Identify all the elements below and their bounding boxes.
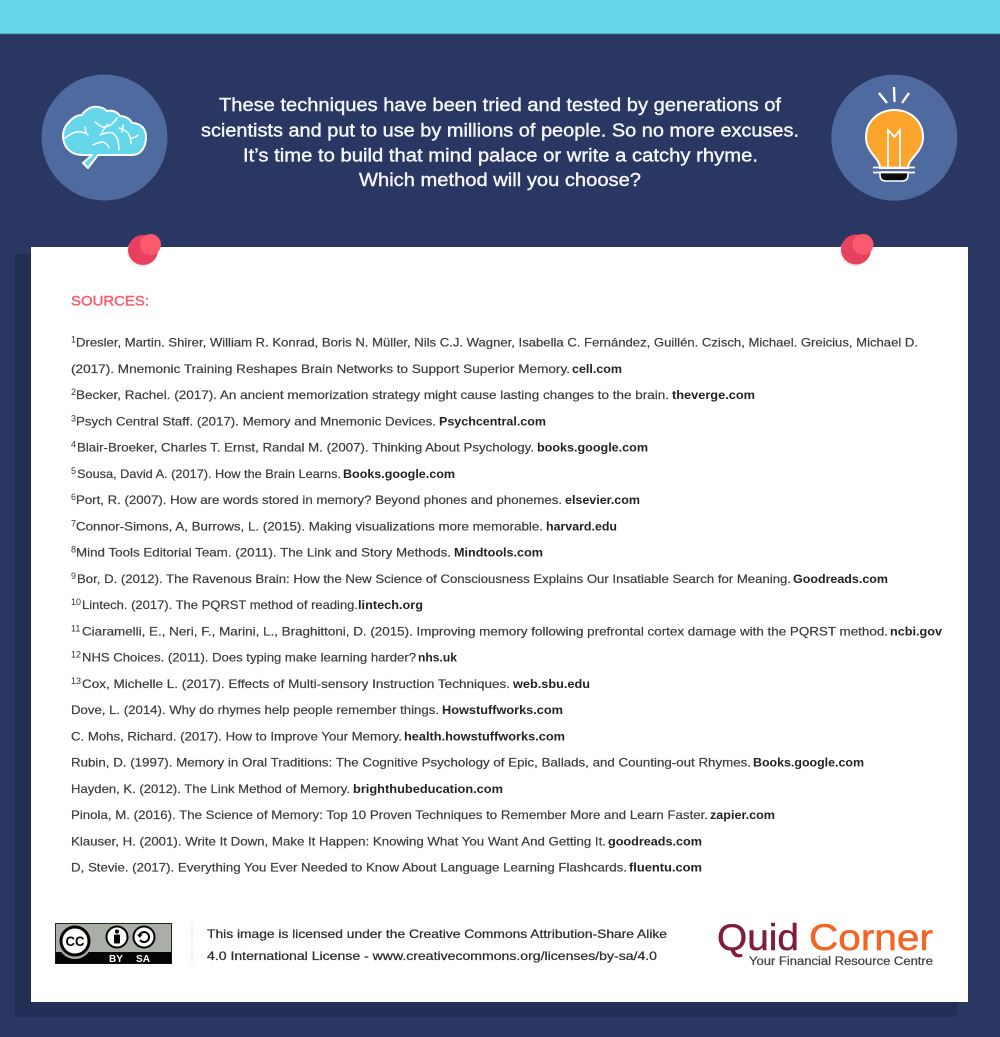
license text	[207, 927, 668, 963]
source 8: Mindtools.com	[454, 546, 543, 560]
license text: This image is licensed under the Creative Commons Attribution-Share Alike	[207, 927, 668, 941]
source 12: nhs.uk	[418, 650, 457, 664]
source: Dove: Dove, L. (2014). Why do rhymes help people remember things.	[71, 703, 439, 717]
source: Pinola: Pinola, M. (2016). The Science of Memory: Top 10 Proven Techniques to Remember More and Learn Faster.	[71, 808, 708, 822]
source 5: Books.google.com	[343, 467, 455, 481]
source 5	[71, 466, 455, 481]
source 7: 7	[71, 518, 76, 528]
icon: brain	[42, 74, 168, 200]
source 3	[71, 413, 546, 428]
source 3: 3	[71, 413, 76, 423]
sources heading: SOURCES:	[71, 292, 149, 308]
source 6: 6	[71, 492, 76, 502]
source 3: Psychcentral.com	[439, 414, 546, 428]
source 12: 12	[71, 650, 81, 660]
pin: left	[127, 234, 161, 267]
intro text: It’s time to build that mind palace or write a catchy rhyme.	[243, 144, 758, 166]
source: D, Stevie: D, Stevie. (2017). Everything You Ever Needed to Know About Language Learning Flashcards.	[71, 860, 627, 874]
source: Mohs: C. Mohs, Richard. (2017). How to Improve Your Memory.	[71, 729, 402, 743]
source 1: (2017). Mnemonic Training Reshapes Brain Networks to Support Superior Memory.	[71, 362, 570, 376]
source: Klauser: Klauser, H. (2001). Write It Down, Make It Happen: Knowing What You Want And Getting It.	[71, 834, 606, 848]
source: Dove	[71, 703, 563, 717]
source 9: Goodreads.com	[793, 572, 888, 586]
source 12: NHS Choices. (2011). Does typing make learning harder?	[82, 650, 416, 664]
source 9: Bor, D. (2012). The Ravenous Brain: How the New Science of Consciousness Explains Our Insatiable Search for Meaning.	[77, 572, 791, 586]
source 1: cell.com	[572, 362, 622, 376]
source 5: Sousa, David A. (2017). How the Brain Learns.	[77, 467, 341, 481]
source 5: 5	[71, 466, 76, 476]
source 8	[71, 544, 543, 560]
icon: creative commons badge: SA	[136, 954, 150, 965]
intro text: scientists and put to use by millions of people. So no more excuses.	[201, 120, 799, 140]
source 13: Cox, Michelle L. (2017). Effects of Multi-sensory Instruction Techniques.	[82, 677, 510, 691]
source 10: 10	[71, 597, 81, 607]
source 10: lintech.org	[358, 598, 423, 612]
source 4: Blair-Broeker, Charles T. Ernst, Randal M. (2007). Thinking About Psychology.	[77, 440, 534, 454]
logo: Quid Corner	[717, 917, 933, 968]
source 2: Becker, Rachel. (2017). An ancient memorization strategy might cause lasting changes to the brain.	[76, 388, 669, 402]
source: Rubin: Rubin, D. (1997). Memory in Oral Traditions: The Cognitive Psychology of Epic, Ballads, and Counting-out Rhymes.	[71, 756, 751, 770]
source: Hayden: brighthubeducation.com	[353, 782, 503, 796]
source 6: Port, R. (2007). How are words stored in memory? Beyond phones and phonemes.	[76, 493, 562, 507]
source 2: 2	[71, 387, 76, 397]
intro text: These techniques have been tried and tested by generations of	[219, 94, 782, 115]
source 7: Connor-Simons, A, Burrows, L. (2015). Making visualizations more memorable.	[76, 519, 543, 533]
source 4: books.google.com	[537, 440, 648, 454]
source 6: elsevier.com	[565, 493, 640, 507]
source: Dove: Howstuffworks.com	[442, 703, 563, 717]
source 1	[71, 334, 918, 376]
source 7: harvard.edu	[546, 519, 617, 533]
logo: Quid Corner: Quid	[717, 917, 799, 958]
source: Klauser: goodreads.com	[608, 834, 702, 848]
source 11: 11	[71, 623, 80, 633]
icon: creative commons badge: CC	[66, 933, 84, 949]
source 4: 4	[71, 440, 76, 450]
logo: Quid Corner: Corner	[809, 917, 933, 958]
icon: creative commons badge: BY	[109, 954, 123, 965]
source 13: 13	[71, 676, 81, 686]
source 9: 9	[71, 571, 76, 581]
icon: light bulb	[831, 75, 957, 201]
license text: 4.0 International License - www.creativecommons.org/licenses/by-sa/4.0	[207, 949, 658, 963]
source 11: ncbi.gov	[890, 624, 942, 638]
source 13: web.sbu.edu	[512, 677, 590, 691]
top band	[0, 0, 1000, 34]
source 1: 1	[71, 334, 76, 344]
source 11: Ciaramelli, E., Neri, F., Marini, L., Braghittoni, D. (2015). Improving memory following prefrontal cortex damage with the PQRST method.	[82, 624, 888, 638]
pin: right	[840, 234, 874, 266]
source: Hayden	[71, 782, 503, 796]
panel shadow	[15, 254, 957, 1017]
source 2: theverge.com	[672, 388, 755, 402]
source: Hayden: Hayden, K. (2012). The Link Method of Memory.	[71, 782, 350, 796]
source 8: 8	[71, 544, 76, 554]
source 10	[71, 597, 423, 612]
source 1: Dresler, Martin. Shirer, William R. Konrad, Boris N. Müller, Nils C.J. Wagner, Isabella C. Fernández, Guillén. Czisch, Michael. Greicius, Michael D.	[76, 336, 918, 350]
source 4	[71, 440, 648, 454]
intro text: Which method will you choose?	[359, 169, 641, 190]
sources list	[71, 334, 942, 874]
panel: sources	[31, 247, 968, 1002]
source: D, Stevie: fluentu.com	[629, 860, 702, 874]
logo: Quid Corner: Your Financial Resource Centre	[749, 956, 933, 968]
source 8: Mind Tools Editorial Team. (2011). The Link and Story Methods.	[76, 546, 451, 560]
source 13	[71, 676, 590, 691]
source: Mohs: health.howstuffworks.com	[404, 729, 565, 743]
source: Rubin: Books.google.com	[753, 756, 864, 770]
source: Mohs	[71, 729, 565, 743]
icon: creative commons badge	[56, 924, 172, 965]
source: Pinola: zapier.com	[710, 808, 775, 822]
intro text	[201, 94, 799, 190]
source 10: Lintech. (2017). The PQRST method of reading.	[82, 598, 358, 612]
source 3: Psych Central Staff. (2017). Memory and Mnemonic Devices.	[76, 414, 436, 428]
